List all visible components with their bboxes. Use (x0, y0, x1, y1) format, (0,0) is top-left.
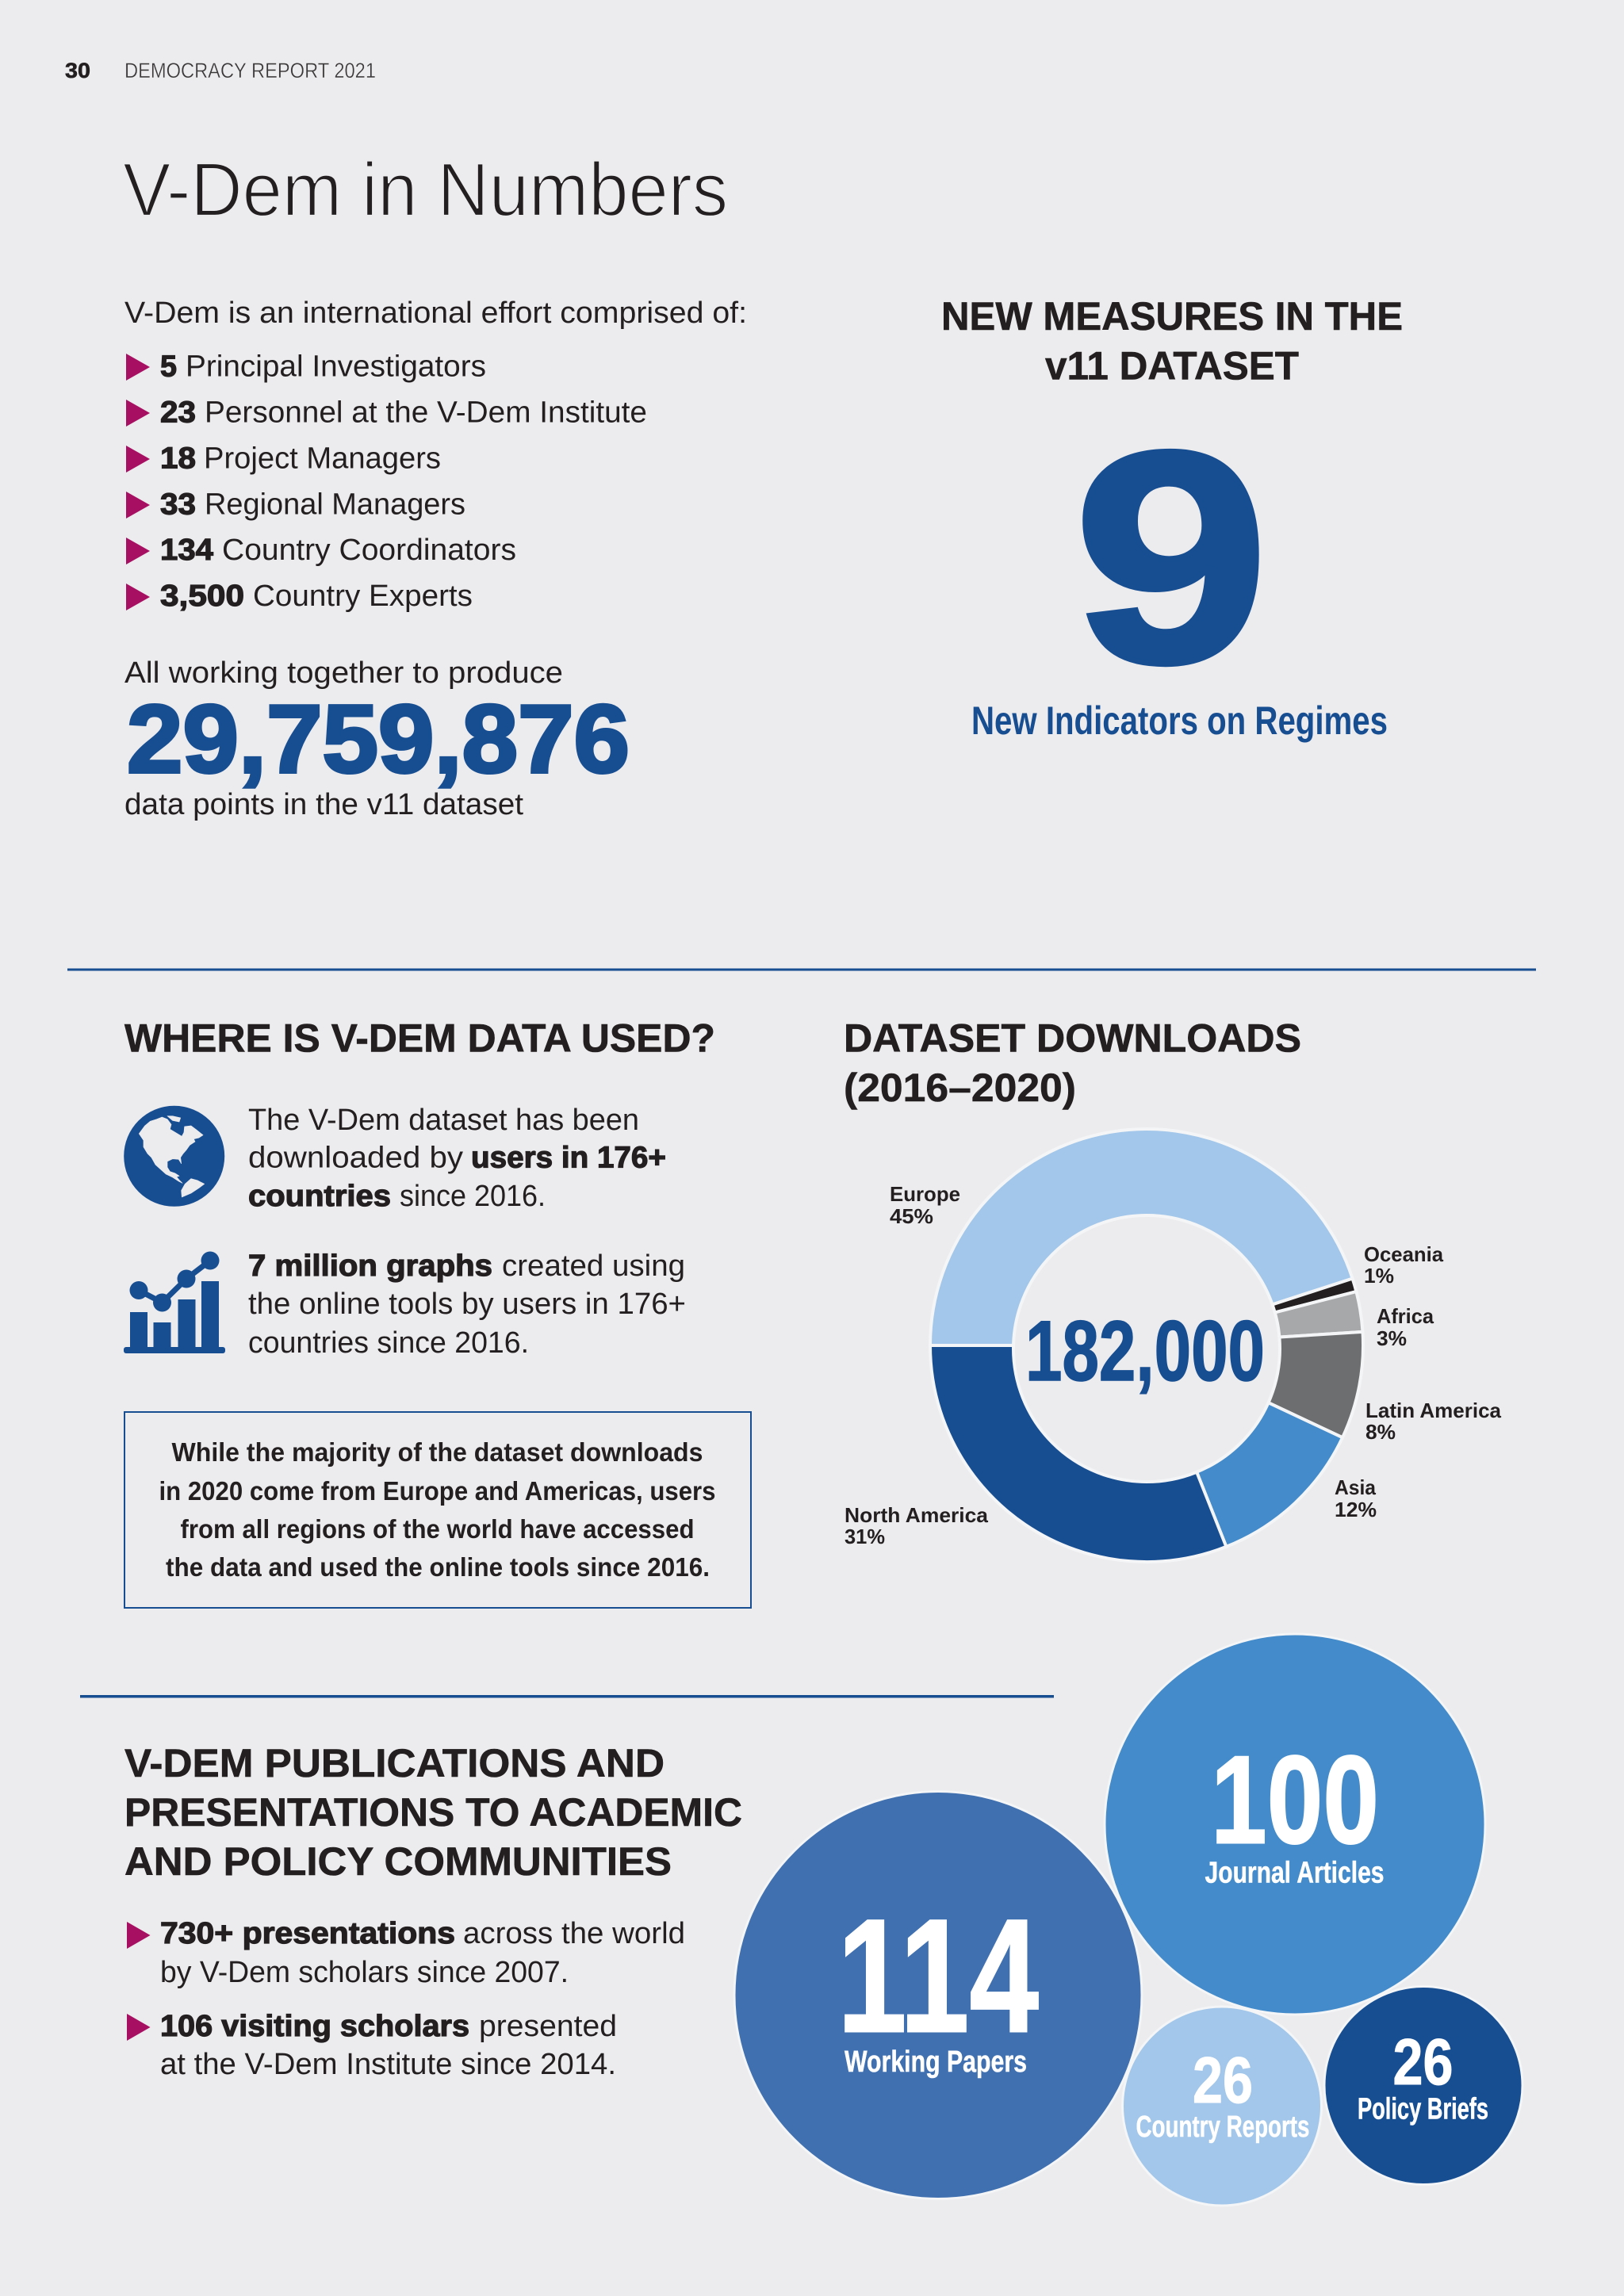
list: personnel: 5 (160, 350, 177, 384)
list: personnel: 134 (160, 534, 213, 567)
donut labels (845, 1182, 1502, 1548)
bubble: country reports: Country Reports (1136, 2110, 1310, 2144)
bubble: country reports: 26 (1193, 2043, 1253, 2117)
donut labels: Africa (1377, 1304, 1434, 1328)
downloads text: since 2016. (400, 1180, 546, 1213)
data points callout: 29,759,876 (127, 685, 630, 793)
heading: NEW MEASURES IN THE (941, 294, 1403, 339)
bubble: working papers (734, 1792, 1142, 2199)
list: visiting scholars: presented (479, 2010, 617, 2043)
donut chart (930, 1129, 1363, 1562)
donut labels: 1% (1364, 1264, 1394, 1288)
heading: WHERE IS V-DEM DATA USED? (124, 1016, 715, 1061)
downloads text: The V-Dem dataset has been (248, 1104, 639, 1137)
bubble: working papers: 114 (837, 1885, 1039, 2066)
heading (941, 294, 1403, 388)
bubble: country reports (1123, 2007, 1321, 2206)
donut labels: 3% (1377, 1326, 1407, 1350)
list: personnel: 23 (160, 396, 196, 430)
heading: PRESENTATIONS TO ACADEMIC (124, 1790, 742, 1835)
data points callout: data points in the v11 dataset (124, 788, 523, 821)
heading: (2016–2020) (844, 1066, 1076, 1110)
panel: dataset downloads (844, 1016, 1502, 1562)
big number nine: 9 (1074, 390, 1269, 725)
list: personnel: 33 (160, 488, 196, 522)
icon: globe (124, 1106, 224, 1207)
heading: v11 DATASET (1045, 344, 1299, 388)
list: visiting scholars: 106 visiting scholars (160, 2010, 469, 2043)
downloads text (248, 1104, 666, 1213)
list: presentations: by V-Dem scholars since 2007. (160, 1956, 569, 1989)
heading: DATASET DOWNLOADS (844, 1016, 1301, 1061)
list: personnel: Regional Managers (205, 488, 465, 522)
list: personnel: Country Experts (253, 580, 473, 613)
list: visiting scholars: at the V-Dem Institute since 2014. (160, 2048, 616, 2081)
donut labels: 31% (845, 1525, 885, 1548)
downloads text: users in 176+ (471, 1142, 666, 1175)
graphs text: countries since 2016. (248, 1326, 529, 1360)
heading (124, 1741, 742, 1884)
icon: chart (124, 1251, 225, 1353)
donut labels: Asia (1335, 1475, 1377, 1499)
callout box: in 2020 come from Europe and Americas, users (159, 1476, 715, 1506)
new indicators label: New Indicators on Regimes (971, 698, 1388, 743)
bubble: policy briefs: Policy Briefs (1358, 2093, 1488, 2126)
list: presentations: across the world (463, 1917, 685, 1950)
heading: V-DEM PUBLICATIONS AND (124, 1741, 665, 1785)
bubble: journal articles: 100 (1211, 1730, 1379, 1869)
graphs text: the online tools by users in 176+ (248, 1288, 686, 1321)
list: visiting scholars (127, 2010, 617, 2081)
callout box (124, 1412, 751, 1608)
graphs text (248, 1249, 686, 1360)
donut total: 182,000 (1025, 1303, 1265, 1399)
bubble: policy briefs (1324, 1987, 1522, 2185)
bubble: policy briefs: 26 (1392, 2025, 1453, 2099)
panel: publications (124, 1741, 742, 2081)
title: V-Dem in Numbers (123, 147, 728, 232)
downloads text: countries (248, 1180, 391, 1213)
panel: V-Dem personnel (124, 297, 747, 821)
graphs text: created using (502, 1249, 685, 1283)
list: personnel: Country Coordinators (222, 534, 516, 567)
donut labels: 45% (890, 1204, 933, 1228)
donut labels: Oceania (1364, 1242, 1444, 1266)
donut labels: Europe (890, 1182, 960, 1206)
donut labels: Latin America (1365, 1399, 1502, 1422)
bubble: journal articles: Journal Articles (1205, 1857, 1385, 1890)
bubble: working papers: Working Papers (845, 2045, 1027, 2079)
callout box: While the majority of the dataset downloads (171, 1437, 703, 1467)
panel: new measures (941, 294, 1403, 743)
list: presentations: 730+ presentations (160, 1917, 455, 1950)
donut labels: 8% (1365, 1420, 1396, 1444)
list: personnel: Principal Investigators (186, 350, 486, 384)
list: personnel: Personnel at the V-Dem Institute (205, 396, 647, 430)
page header: 30 (65, 59, 90, 82)
donut labels: 12% (1335, 1498, 1377, 1521)
bubble: journal articles (1105, 1634, 1485, 2015)
heading (844, 1016, 1301, 1110)
panel: where is data used (124, 1016, 751, 1608)
intro text: V-Dem is an international effort comprised of: (124, 297, 747, 330)
list: personnel (126, 350, 647, 613)
callout box: from all regions of the world have accessed (181, 1514, 695, 1544)
data points callout (124, 656, 630, 821)
donut labels: North America (845, 1503, 989, 1527)
list: personnel: 3,500 (160, 580, 244, 613)
downloads text: downloaded by (248, 1142, 463, 1175)
heading: AND POLICY COMMUNITIES (124, 1839, 672, 1884)
data points callout: All working together to produce (124, 656, 563, 690)
list: personnel: 18 (160, 442, 196, 476)
callout box: the data and used the online tools since 2016. (166, 1552, 710, 1582)
list: presentations (127, 1917, 685, 1989)
graphs text: 7 million graphs (248, 1249, 492, 1283)
page header: DEMOCRACY REPORT 2021 (124, 59, 376, 82)
list: personnel: Project Managers (204, 442, 441, 476)
